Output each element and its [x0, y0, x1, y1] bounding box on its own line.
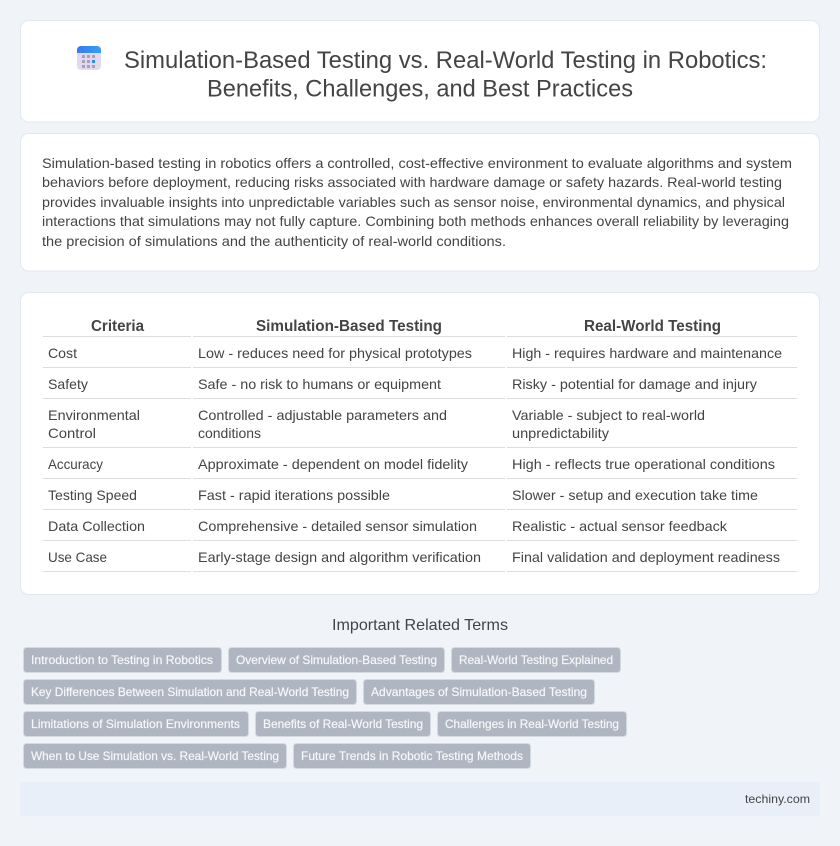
- row: use case: Early-stage design and algorithm verification: [198, 549, 481, 565]
- row: use case: Final validation and deployment readiness: [512, 549, 780, 565]
- title: Benefits, Challenges, and Best Practices: [207, 76, 633, 102]
- row: accuracy: [48, 456, 775, 472]
- title: Simulation-Based Testing vs. Real-World Testing in Robotics:: [124, 47, 767, 74]
- tag: [364, 680, 594, 704]
- row: environmental control: conditions: [198, 425, 261, 441]
- footer: techiny.com: [745, 792, 810, 806]
- tag: Advantages of Simulation-Based Testing: [371, 685, 587, 699]
- icon: calendar: [77, 46, 101, 70]
- table header: Simulation-Based Testing: [256, 318, 442, 335]
- row: testing speed: Testing Speed: [48, 487, 137, 503]
- tag: [24, 712, 248, 736]
- panel: comparison table: [20, 292, 820, 594]
- tag: [438, 712, 626, 736]
- heading: related terms: Important Related Terms: [332, 617, 508, 634]
- tags: related terms: [24, 648, 626, 768]
- row: safety: Safe - no risk to humans or equipment: [198, 376, 441, 392]
- tag: Future Trends in Robotic Testing Methods: [301, 749, 523, 763]
- row: safety: Safety: [48, 376, 88, 392]
- intro text block: [42, 155, 792, 249]
- tag: [294, 744, 530, 768]
- intro text block: the precision of simulations and the authenticity of real-world conditions.: [42, 233, 506, 249]
- row: data collection: Realistic - actual sensor feedback: [512, 518, 728, 534]
- row: environmental control: [48, 407, 705, 441]
- row: environmental control: Controlled - adjustable parameters and: [198, 407, 447, 423]
- panel: title header: [20, 20, 820, 122]
- row: testing speed: Slower - setup and execution take time: [512, 487, 758, 503]
- table header: Criteria: [91, 318, 144, 335]
- row: testing speed: [48, 487, 758, 503]
- tag: [24, 680, 356, 704]
- row: use case: [48, 549, 780, 565]
- tag: Challenges in Real-World Testing: [445, 717, 619, 731]
- tag: Benefits of Real-World Testing: [263, 717, 423, 731]
- tag: [256, 712, 430, 736]
- table header: [91, 318, 721, 335]
- title: [124, 47, 767, 102]
- intro text block: provides invaluable insights into unpredictable variables such as sensor noise, environmental dynamics, and physical: [42, 194, 785, 210]
- row: data collection: [48, 518, 728, 534]
- row: cost: Cost: [48, 345, 77, 361]
- intro text block: Simulation-based testing in robotics offers a controlled, cost-effective environment to evaluate algorithms and system: [42, 155, 792, 171]
- row: data collection: Data Collection: [48, 518, 145, 534]
- row: accuracy: High - reflects true operational conditions: [512, 456, 775, 472]
- row: safety: [48, 376, 757, 392]
- intro text block: behaviors before deployment, reducing risks associated with hardware damage or safety hazards. Real-world testing: [42, 174, 782, 190]
- row: testing speed: Fast - rapid iterations possible: [198, 487, 390, 503]
- row: environmental control: Control: [48, 425, 96, 441]
- row: accuracy: Approximate - dependent on model fidelity: [198, 456, 468, 472]
- row: accuracy: Accuracy: [48, 456, 103, 472]
- table header: Real-World Testing: [584, 318, 721, 335]
- tag: [24, 648, 222, 672]
- row: cost: Low - reduces need for physical prototypes: [198, 345, 472, 361]
- tag: [452, 648, 620, 672]
- row: environmental control: Environmental: [48, 407, 140, 423]
- row: environmental control: Variable - subject to real-world: [512, 407, 705, 423]
- tag: [24, 744, 286, 768]
- tag: Real-World Testing Explained: [459, 653, 613, 667]
- intro text block: interactions that simulations may not fully capture. Combining both methods enhances overall reliability by leveraging: [42, 213, 789, 229]
- tag: Introduction to Testing in Robotics: [31, 653, 213, 667]
- tag: When to Use Simulation vs. Real-World Testing: [31, 749, 279, 763]
- footer: [20, 782, 820, 816]
- tag: [228, 648, 444, 672]
- row: use case: Use Case: [48, 549, 107, 565]
- row: environmental control: unpredictability: [512, 425, 609, 441]
- row: data collection: Comprehensive - detailed sensor simulation: [198, 518, 477, 534]
- tag: Key Differences Between Simulation and Real-World Testing: [31, 685, 349, 699]
- row: cost: High - requires hardware and maintenance: [512, 345, 782, 361]
- panel: introduction: [20, 134, 820, 271]
- tag: Overview of Simulation-Based Testing: [236, 653, 437, 667]
- row: safety: Risky - potential for damage and injury: [512, 376, 757, 392]
- row: cost: [48, 345, 782, 361]
- tag: Limitations of Simulation Environments: [31, 717, 240, 731]
